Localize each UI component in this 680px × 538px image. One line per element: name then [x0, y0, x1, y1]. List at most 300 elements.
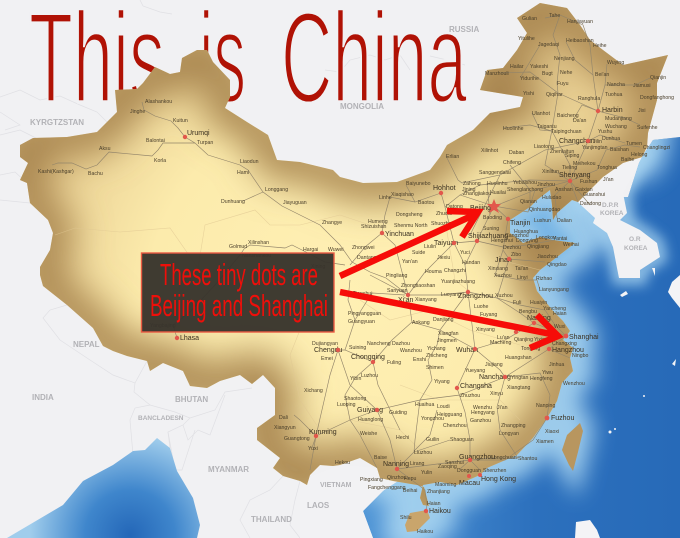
city labels: Heigguang: [437, 412, 462, 418]
city labels: Yidurihe: [520, 76, 539, 82]
country labels: KOREA: [600, 210, 624, 217]
city labels: Ji'an: [603, 177, 614, 183]
city labels: Tongling: [521, 346, 540, 352]
city labels: Yishi: [523, 91, 534, 97]
city labels: Nancheng: [367, 341, 391, 347]
city labels: Hepu: [404, 476, 417, 482]
city labels: Wenzhou: [563, 381, 585, 387]
country labels: THAILAND: [251, 515, 292, 524]
city labels: Qianan: [520, 199, 537, 205]
city labels: Dazhou: [392, 341, 410, 347]
city labels: Shimen: [426, 365, 444, 371]
major cities: Shijiazhuang: [468, 233, 508, 240]
city labels: Longgang: [265, 187, 288, 193]
major cities: Chengdu: [314, 347, 343, 354]
city labels: Fangchenggang: [368, 485, 406, 491]
city labels: Daban: [509, 150, 524, 156]
city labels: Ningbo: [572, 353, 589, 359]
city labels: Baishan: [610, 147, 629, 153]
city labels: Huolinhe: [503, 126, 524, 132]
city labels: Shenglanchong: [507, 187, 543, 193]
city labels: Huanglong: [358, 417, 383, 423]
city labels: Jinhua: [549, 362, 564, 368]
city labels: Heihe: [593, 43, 607, 49]
city labels: Zhongwei: [352, 245, 374, 251]
city labels: Dezhou: [503, 245, 521, 251]
city labels: Qianjin: [650, 75, 666, 81]
country labels: KYRGTZSTAN: [30, 118, 84, 127]
city labels: Zhangjiakou: [463, 191, 491, 197]
city labels: Lushun: [534, 218, 551, 224]
icon: Beijing star: [487, 199, 501, 213]
city labels: Dongfanghong: [640, 95, 674, 101]
city labels: Yitulihe: [518, 36, 535, 42]
country labels: KOREA: [624, 245, 648, 252]
major cities: Macau: [459, 480, 480, 487]
city labels: Huludao: [542, 195, 561, 201]
city labels: Wuxi: [554, 324, 565, 330]
city labels: Jiaozhou: [537, 254, 558, 260]
city labels: Bugt: [542, 71, 553, 77]
city labels: Nanshankou: [242, 253, 271, 259]
city labels: Lu'an: [497, 335, 510, 341]
city labels: Luoping: [337, 402, 356, 408]
city labels: Datong: [446, 204, 463, 210]
city labels: Huaihua: [415, 402, 434, 408]
city labels: Bachu: [88, 171, 103, 177]
city labels: Pingyangguan: [348, 311, 381, 317]
major cities: Tianjin: [510, 220, 530, 227]
city labels: Yancheng: [543, 306, 566, 312]
country labels: O.R: [629, 236, 641, 243]
sea: Bay of Bengal: [7, 438, 200, 538]
city labels: Yebaishou: [513, 180, 537, 186]
city labels: Yuanjiazhuang: [441, 279, 475, 285]
city labels: Longkou: [536, 235, 556, 241]
city labels: Yantai: [553, 236, 567, 242]
city labels: Anshan: [555, 187, 573, 193]
country labels: D.P.R: [602, 202, 619, 209]
city labels: Xiangyun: [274, 425, 296, 431]
city labels: Jiayuguan: [283, 200, 307, 206]
city labels: Yueyang: [465, 368, 485, 374]
city labels: Shenzhen: [483, 468, 506, 474]
city labels: Huangshan: [505, 355, 532, 361]
city labels: Zaoqing: [438, 464, 457, 470]
city labels: Qianjing: [514, 337, 533, 343]
major cities: Xi'an: [398, 297, 413, 304]
city labels: Baicheng: [557, 113, 579, 119]
city labels: Heibaoshan: [566, 38, 594, 44]
city labels: Mudanjiang: [605, 116, 632, 122]
city labels: Fuyang: [480, 312, 497, 318]
city labels: Fuling: [387, 360, 401, 366]
city labels: Linyi: [517, 275, 528, 281]
callout box: Beijing and Shanghai: [150, 288, 328, 323]
country labels: LAOS: [307, 501, 330, 510]
city labels: Changxing: [552, 341, 577, 347]
city labels: Taipingchuan: [551, 129, 582, 135]
major cities: Hangzhou: [552, 347, 584, 354]
city labels: Zhangping: [501, 423, 526, 429]
city labels: Xiaqishao: [391, 192, 414, 198]
city labels: Changzhi: [444, 268, 466, 274]
city labels: Wuying: [607, 60, 624, 66]
city labels: Suining: [349, 345, 366, 351]
major cities: Taiyuan: [434, 240, 458, 247]
city labels: Hengfeng: [530, 376, 553, 382]
city labels: Xiaoxi: [545, 429, 559, 435]
title: [29, 0, 467, 130]
city labels: Tahe: [549, 13, 560, 19]
city labels: Wenzhu: [473, 405, 492, 411]
city labels: Hechi: [396, 435, 409, 441]
city labels: Helong: [631, 152, 648, 158]
city labels: Tai'an: [515, 266, 529, 272]
city labels: Dali: [279, 415, 288, 421]
city labels: Suide: [412, 250, 425, 256]
city labels: Guangyuan: [348, 319, 375, 325]
city labels: Xinlitun: [542, 169, 559, 175]
major cities: Shanghai: [569, 334, 599, 341]
city labels: Yuxi: [308, 446, 318, 452]
city labels: Hanjiayuan: [567, 19, 593, 25]
city labels: Xinyu: [490, 391, 503, 397]
city labels: Tonghua: [597, 165, 617, 171]
city labels: Sanyuan: [387, 288, 408, 294]
major cities: Kunming: [309, 429, 337, 436]
city labels: Yushu: [598, 129, 613, 135]
city labels: Golmud: [229, 244, 247, 250]
city labels: Nehe: [560, 70, 573, 76]
city labels: Macheng: [490, 340, 511, 346]
city labels: Da'an: [573, 118, 587, 124]
city labels: Yongzhou: [421, 416, 444, 422]
arrow: to Shanghai: [340, 292, 558, 348]
city labels: Huailai: [490, 190, 506, 196]
city labels: Zhuzhou: [460, 393, 480, 399]
major cities: Jinan: [495, 257, 512, 264]
city labels: Zibo: [511, 252, 521, 258]
city labels: Weishe: [360, 431, 377, 437]
country labels: MONGOLIA: [340, 102, 384, 111]
city labels: Rizhao: [536, 276, 552, 282]
city labels: Meihekou: [573, 161, 596, 167]
city labels: Yanjimgtan: [582, 145, 608, 151]
city labels: Shizuishan: [361, 224, 386, 230]
city labels: Jingmen: [437, 338, 457, 344]
city labels: Shantou: [518, 456, 537, 462]
city labels: Zhenlaitun: [550, 149, 574, 155]
city labels: Yan'an: [402, 259, 418, 265]
city labels: Sanggendalai: [479, 170, 511, 176]
major cities: Hohhot: [433, 185, 456, 192]
city labels: Shuozhou: [431, 221, 454, 227]
city labels: Jiexiu: [437, 255, 450, 261]
city labels: Jiujiang: [485, 362, 503, 368]
city labels: Changlingzi: [643, 145, 670, 151]
city labels: Xinyang: [476, 327, 495, 333]
major cities: Haikou: [429, 508, 451, 515]
city labels: Xuzhou: [495, 293, 513, 299]
country labels: BHUTAN: [175, 395, 208, 404]
city labels: Dunhua: [602, 136, 620, 142]
city labels: Qingdao: [547, 262, 567, 268]
city labels: Ganzhou: [470, 418, 491, 424]
city labels: Chenzhou: [443, 423, 467, 429]
city labels: Xinxiang: [488, 266, 508, 272]
city labels: Baise: [374, 455, 387, 461]
country labels: VIETNAM: [320, 482, 352, 489]
city labels: Fushun: [580, 179, 597, 185]
city labels: Zahong: [463, 181, 481, 187]
city labels: Weihai: [563, 242, 579, 248]
city labels: Ranghula: [578, 96, 600, 102]
city labels: Huanghua: [514, 229, 538, 235]
city labels: Qinhuangdao: [529, 207, 560, 213]
city labels: Xuzhou: [494, 273, 512, 279]
city labels: Hengshui: [491, 238, 513, 244]
city labels: Alashankou: [145, 99, 172, 105]
city labels: Tianshui: [353, 291, 372, 297]
city labels: Xilinshan: [248, 240, 269, 246]
city labels: Zhuolu: [436, 211, 452, 217]
city labels: Jilin: [593, 139, 602, 145]
city labels: Nanping: [536, 403, 555, 409]
major cities: Guiyang: [357, 407, 383, 414]
city labels: Hargai: [303, 247, 318, 253]
city labels: Hekou: [335, 460, 350, 466]
city labels: Hengyang: [471, 410, 495, 416]
city labels: Fuli: [513, 300, 521, 306]
major cities: Wuhan: [456, 347, 478, 354]
country labels: BANCLADESN: [138, 415, 184, 422]
city labels: Dalian: [557, 218, 572, 224]
city labels: Manzhouli: [485, 71, 509, 77]
city labels: Baiyunebo: [406, 181, 431, 187]
city labels: Guiding: [389, 410, 407, 416]
city labels: Suifenhe: [637, 125, 658, 131]
arrow: to Beijing: [340, 211, 478, 276]
city labels: Yingtan: [511, 375, 529, 381]
city labels: Zhongtiaoshan: [401, 283, 435, 289]
city labels: Lianyungang: [539, 287, 569, 293]
city labels: Xining: [311, 264, 326, 270]
city labels: Fuyu: [557, 81, 569, 87]
city labels: Qingjiang: [527, 244, 549, 250]
city labels: Dantang: [357, 255, 377, 261]
major cities: Shenyang: [559, 172, 591, 179]
city labels: Jiamusi: [633, 83, 651, 89]
islands: Japan and Philippines: [575, 268, 680, 538]
city labels: Haian: [427, 501, 441, 507]
city labels: Yakeshi: [530, 64, 548, 70]
callout box: [142, 253, 334, 332]
country labels: INDIA: [32, 393, 54, 402]
city labels: Jinghe: [130, 109, 145, 115]
city labels: Xiangtang: [507, 385, 530, 391]
city labels: Haian: [553, 311, 567, 317]
city labels: Jixi: [638, 108, 646, 114]
city labels: Wuwei: [328, 247, 343, 253]
city labels: Shaoguan: [450, 437, 474, 443]
city labels: Hailar: [510, 64, 524, 70]
city labels: Haikou: [417, 529, 433, 535]
city labels: Linhe: [379, 195, 392, 201]
major cities: Lhasa: [180, 335, 199, 342]
city labels: Shaotong: [344, 396, 366, 402]
city labels: Aksu: [99, 146, 111, 152]
city labels: Yichang: [427, 346, 446, 352]
city labels: Baotou: [418, 200, 435, 206]
city labels: Xiamen: [536, 439, 554, 445]
city labels: Maoming: [435, 482, 456, 488]
city labels: Guangtong: [284, 436, 310, 442]
city labels: Longchuan: [491, 455, 517, 461]
city labels: Enshi: [413, 357, 426, 363]
major cities: Urumqi: [187, 130, 210, 137]
major cities: Nanjing: [527, 315, 551, 322]
city labels: Xilinhot: [481, 148, 499, 154]
city labels: Tieling: [562, 165, 577, 171]
major cities: Beijing: [470, 205, 491, 212]
city labels: Erlian: [446, 154, 459, 160]
major cities: Chongqing: [351, 354, 385, 361]
city labels: Qinzhou: [387, 475, 406, 481]
country labels: RUSSIA: [449, 25, 479, 34]
city labels: Shilu: [400, 515, 412, 521]
city labels: Nenjiang: [554, 56, 575, 62]
city labels: Jinzhou: [537, 182, 555, 188]
city labels: Huolinhu: [487, 181, 508, 187]
city labels: Yuci: [460, 250, 470, 256]
city labels: Cangzhou: [505, 233, 529, 239]
city labels: Dongying: [516, 238, 538, 244]
major cities: Zhengzhou: [458, 293, 493, 300]
city labels: Yixing: [534, 337, 548, 343]
city labels: Luoyang: [441, 292, 461, 298]
city labels: Liaotong: [534, 144, 554, 150]
city labels: Xianyang: [415, 297, 437, 303]
city labels: Yiyang: [434, 379, 450, 385]
country labels: NEPAL: [73, 340, 100, 349]
city labels: Yulin: [421, 470, 432, 476]
major cities: Harbin: [602, 107, 623, 114]
city labels: Xichang: [304, 388, 323, 394]
city labels: Qiqihar: [546, 92, 563, 98]
city labels: Lirang: [410, 461, 425, 467]
city labels: Korla: [154, 158, 166, 164]
city labels: Wuchang: [605, 124, 627, 130]
city labels: Liuzhou: [414, 450, 432, 456]
major cities: Fuzhou: [551, 415, 574, 422]
city labels: Wanzhou: [400, 348, 422, 354]
city labels: Hami: [237, 170, 249, 176]
city labels: Dandong: [580, 201, 601, 207]
city labels: Danjiang: [433, 317, 454, 323]
city labels: Longyan: [499, 431, 519, 437]
land: Korean peninsula: [578, 157, 660, 278]
city labels: Tuohua: [605, 92, 623, 98]
city labels: Handan: [462, 260, 480, 266]
city labels: Liulin: [424, 244, 436, 250]
city labels: Baoding: [483, 215, 502, 221]
country labels: MYANMAR: [208, 465, 249, 474]
callout box: These tiny dots are: [160, 257, 318, 292]
major cities: Guangzhou: [459, 454, 495, 461]
city labels: Xiangfan: [438, 331, 459, 337]
city labels: Dujiangyan: [312, 341, 338, 347]
city labels: Humeng: [368, 219, 388, 225]
city labels: Dunhuang: [221, 199, 245, 205]
city labels: Loudi: [437, 404, 450, 410]
city labels: Zhicheng: [426, 353, 447, 359]
city labels: Nancha: [607, 82, 625, 88]
major cities: Nanning: [383, 461, 409, 468]
city labels: Zhangye: [322, 220, 342, 226]
city labels: Jagedaqi: [538, 42, 559, 48]
city labels: Dongguan: [457, 468, 481, 474]
city labels: Baihe: [621, 157, 634, 163]
land: Vietnam coast: [300, 465, 393, 538]
city labels: Ulanhot: [532, 111, 550, 117]
major cities: Nanchang: [479, 374, 511, 381]
city labels: Kashi(Kashgar): [38, 169, 74, 175]
city labels: Yiwu: [542, 370, 553, 376]
city labels: Luzhou: [361, 373, 378, 379]
city labels: Dongsheng: [396, 212, 423, 218]
city labels: Guanshui: [583, 192, 605, 198]
major cities: Changchun: [559, 138, 595, 145]
city labels: Siping: [565, 153, 580, 159]
city labels: Chifeng: [503, 160, 521, 166]
city labels: Guilin: [426, 437, 439, 443]
major cities: Changsha: [460, 383, 492, 390]
city labels: Sanshui: [445, 460, 464, 466]
city labels: Zhanjiang: [427, 489, 450, 495]
major cities: Hong Kong: [481, 476, 516, 483]
city labels: Balontai: [146, 138, 165, 144]
city labels: Bengbu: [519, 309, 537, 315]
city labels: Ankang: [412, 320, 430, 326]
city labels: Houma: [425, 269, 442, 275]
city labels: Yangbajing: [150, 323, 176, 329]
major cities: [180, 107, 623, 515]
city labels: Pingxiang: [360, 477, 383, 483]
city labels: Gulian: [522, 16, 537, 22]
city labels: Taigantu: [537, 124, 557, 130]
city labels: Ji'an: [497, 405, 508, 411]
city labels: Bei'an: [595, 72, 609, 78]
city labels: Luohe: [474, 304, 489, 310]
city labels: Emei: [321, 356, 333, 362]
city labels: Turpan: [197, 140, 213, 146]
city labels: Tumen: [626, 141, 642, 147]
city labels: Shenmu North: [394, 223, 428, 229]
city labels: Huaiyin: [530, 300, 547, 306]
city labels: Yibin: [350, 376, 361, 382]
city labels: Pingliang: [386, 273, 407, 279]
city labels: Jining: [462, 187, 476, 193]
city markers: [175, 109, 600, 513]
major cities: Yinchuan: [385, 231, 414, 238]
city labels: Suning: [483, 226, 499, 232]
sea: East and South China Sea: [363, 137, 680, 538]
city labels: Beihai: [403, 488, 417, 494]
city labels: Kuitun: [173, 118, 188, 124]
city labels: Gaixian: [575, 187, 593, 193]
city labels: Liaodun: [240, 159, 259, 165]
